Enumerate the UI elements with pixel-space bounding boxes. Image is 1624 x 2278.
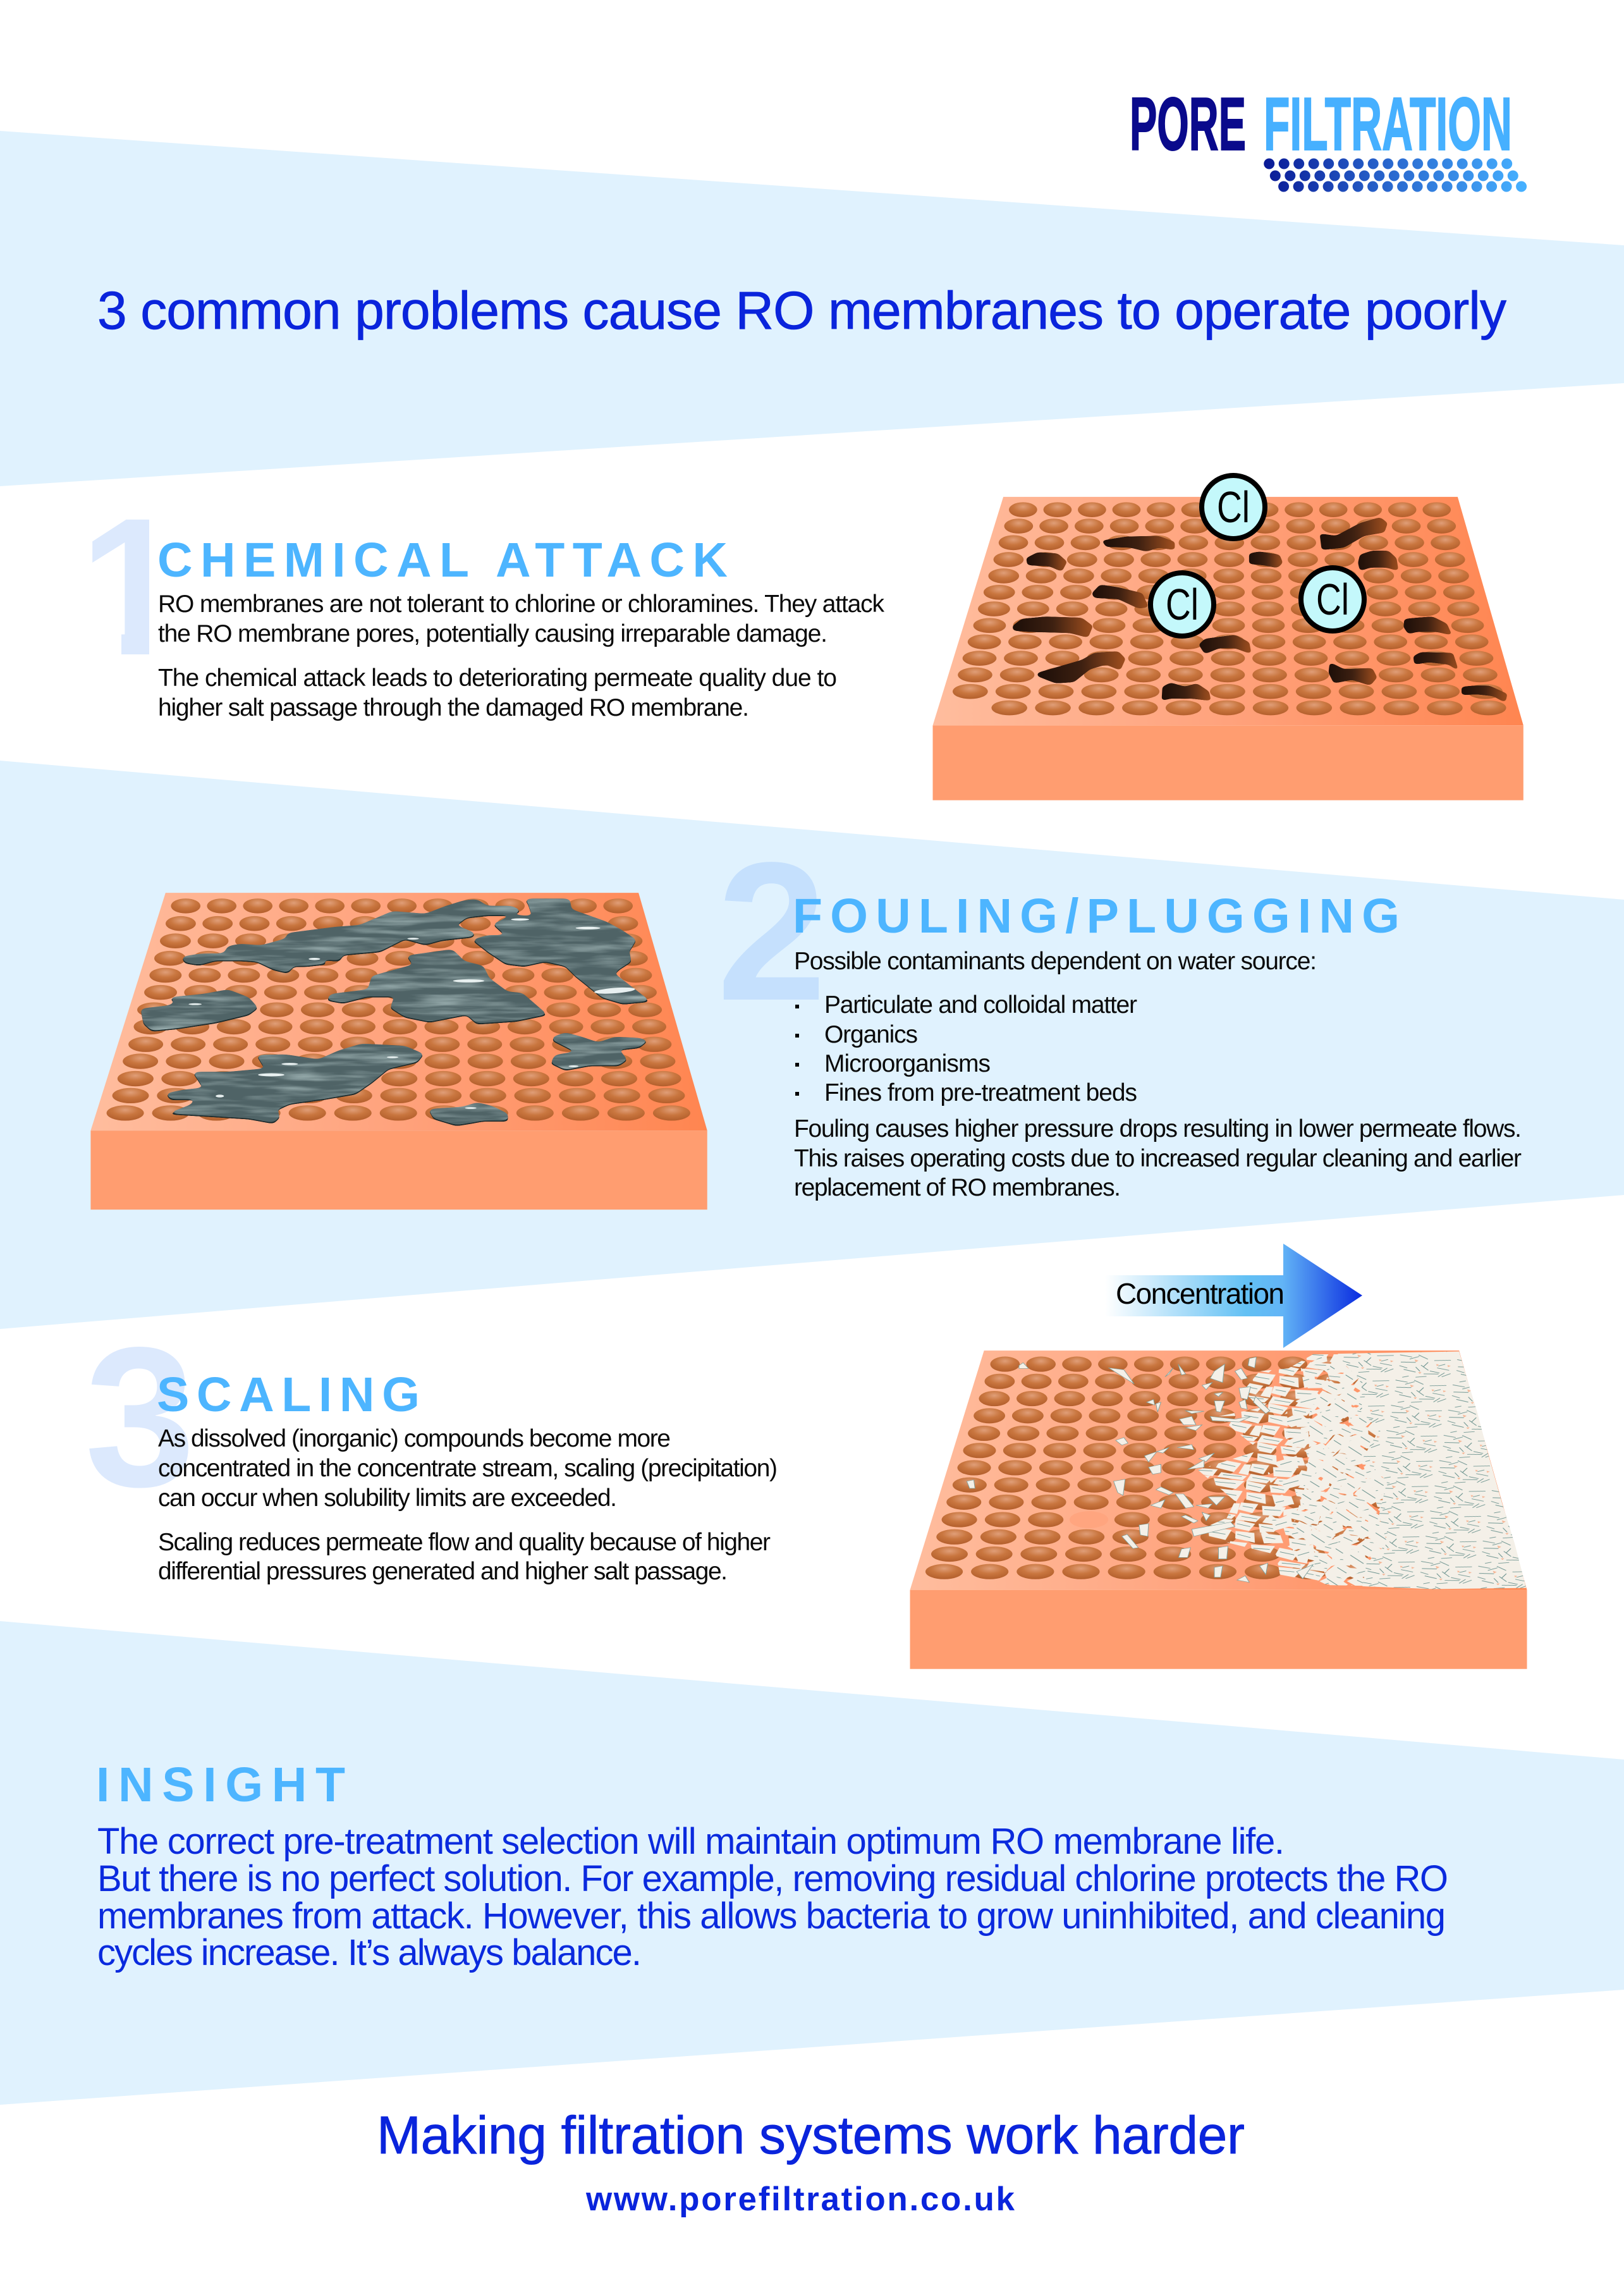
scale crystals: dense xyxy=(1338,1352,1526,1589)
text block: insight: The correct pre-treatment selection will maintain optimum RO membrane life. xyxy=(97,1821,1285,1862)
text block: chemical attack: The chemical attack leads to deteriorating permeate quality due to xyxy=(158,664,837,692)
icon: chlorine atom xyxy=(1151,573,1214,636)
text block: insight: membranes from attack. However, this allows bacteria to grow uninhibited, and cleaning xyxy=(97,1895,1446,1937)
heading: fouling/plugging: FOULING/PLUGGING xyxy=(793,889,1400,943)
title: 3 common problems cause RO membranes to operate poorly xyxy=(97,281,1506,340)
text block: fouling effects: This raises operating costs due to increased regular cleaning and earlier xyxy=(794,1145,1522,1172)
arrow: concentration: Concentration xyxy=(1116,1277,1285,1310)
icon: chlorine atom xyxy=(1202,475,1265,539)
icon: chlorine atom xyxy=(1301,568,1364,631)
text block: insight xyxy=(97,1821,1448,1973)
illustration: chemical attack membrane xyxy=(933,475,1523,800)
icon: chlorine atom: Cl xyxy=(1217,482,1250,532)
number 3: 3 xyxy=(85,1306,195,1528)
website: www.porefiltration.co.uk xyxy=(585,2181,1015,2218)
background band: fouling xyxy=(0,761,1624,1329)
illustration: fouling membrane xyxy=(90,893,707,1209)
text block: scaling: Scaling reduces permeate flow and quality because of higher xyxy=(158,1529,771,1556)
text block: scaling xyxy=(158,1425,778,1585)
number 1: 1 xyxy=(79,477,188,696)
text block: scaling: can occur when solubility limits are exceeded. xyxy=(158,1485,617,1512)
heading: scaling: SCALING xyxy=(157,1368,420,1422)
text block: scaling: As dissolved (inorganic) compounds become more xyxy=(158,1425,671,1452)
text block: chemical attack: higher salt passage through the damaged RO membrane. xyxy=(158,694,749,721)
text block: chemical attack: RO membranes are not tolerant to chlorine or chloramines. They attack xyxy=(158,591,885,618)
heading: chemical attack: CHEMICAL ATTACK xyxy=(157,533,728,587)
arrow: concentration xyxy=(1105,1244,1362,1348)
tagline: Making filtration systems work harder xyxy=(377,2105,1245,2165)
logo: Pore Filtration: PORE xyxy=(1130,82,1246,166)
list: contaminants: Particulate and colloidal matter xyxy=(824,991,1137,1019)
text block: chemical attack: the RO membrane pores, potentially causing irreparable damage. xyxy=(158,620,827,647)
text block: fouling intro: Possible contaminants dependent on water source: xyxy=(794,948,1317,975)
icon: chlorine atom: Cl xyxy=(1316,575,1349,624)
text block: fouling effects xyxy=(794,1115,1522,1201)
text block: scaling: concentrated in the concentrate stream, scaling (precipitation) xyxy=(158,1455,778,1482)
illustration: scaling membrane xyxy=(910,1350,1527,1669)
text block: insight: But there is no perfect solution. For example, removing residual chlorine protects the RO xyxy=(97,1858,1448,1899)
logo: Pore Filtration xyxy=(1130,82,1522,187)
scale crystals: medium density xyxy=(1194,1354,1432,1587)
background band: insight xyxy=(0,1621,1624,2105)
number 2: 2 xyxy=(717,822,827,1042)
scattered crystals xyxy=(967,1357,1313,1583)
text block: chemical attack xyxy=(158,591,885,721)
text block: scaling: differential pressures generated and higher salt passage. xyxy=(158,1558,728,1585)
list: contaminants: Organics xyxy=(824,1021,918,1048)
icon: chlorine atom: Cl xyxy=(1166,580,1199,629)
list: contaminants: Microorganisms xyxy=(824,1050,991,1077)
heading: insight: INSIGHT xyxy=(96,1758,345,1812)
text block: fouling effects: replacement of RO membranes. xyxy=(794,1174,1121,1201)
list: contaminants: Fines from pre-treatment beds xyxy=(824,1079,1137,1106)
text block: fouling effects: Fouling causes higher pressure drops resulting in lower permeate flows. xyxy=(794,1115,1522,1142)
text block: insight: cycles increase. It’s always balance. xyxy=(97,1932,642,1973)
list: contaminants xyxy=(795,991,1137,1106)
background band: title xyxy=(0,131,1624,486)
